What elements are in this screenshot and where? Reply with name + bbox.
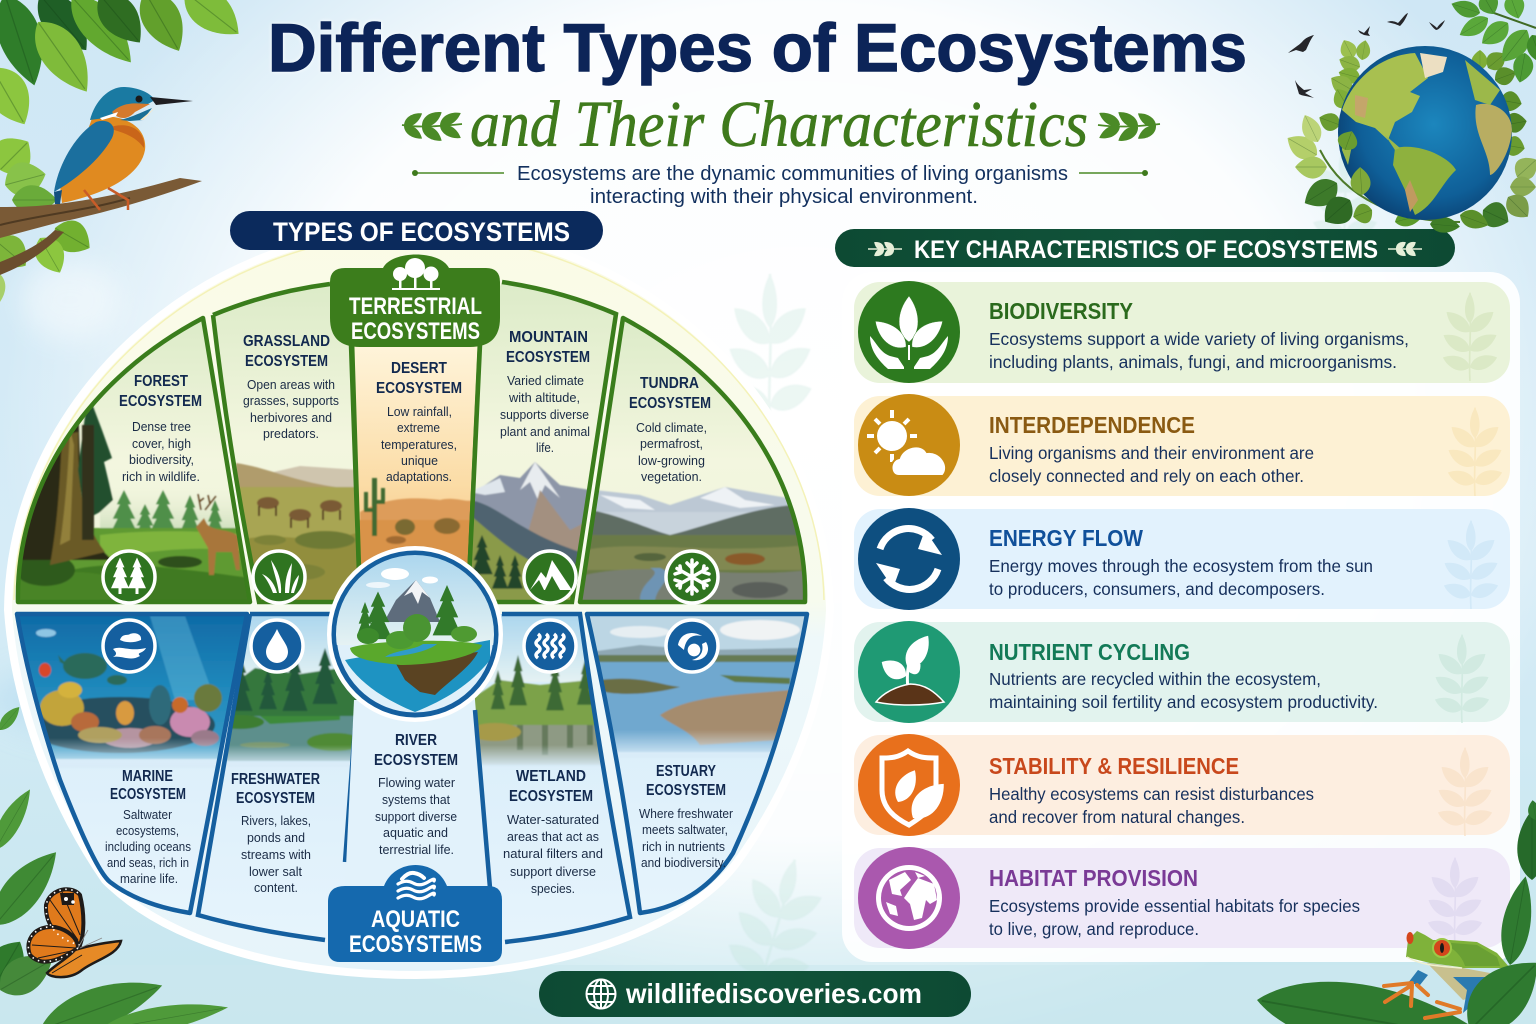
panel: marine ecosystem: MARINE xyxy=(122,768,173,785)
panel: wetland ecosystem: areas that act as xyxy=(507,829,599,844)
heading: key characteristics xyxy=(835,229,1455,267)
card: interdependence xyxy=(854,394,1510,496)
grassland scene xyxy=(236,462,356,600)
wetland scene xyxy=(474,614,600,765)
illustration: bottom-right leaves and frog xyxy=(1252,799,1536,1024)
panel: marine ecosystem: including oceans xyxy=(105,839,191,854)
estuary scene xyxy=(590,616,804,752)
badge: terrestrial ecosystems: ECOSYSTEMS xyxy=(351,318,480,345)
panel: mountain ecosystem: supports diverse xyxy=(500,407,589,422)
panel: forest ecosystem: rich in wildlife. xyxy=(122,469,200,484)
panel: forest ecosystem xyxy=(10,318,260,608)
panel: forest ecosystem: FOREST xyxy=(134,373,188,390)
panel: marine ecosystem xyxy=(10,614,250,913)
panel: wetland ecosystem: WETLAND xyxy=(516,768,586,785)
panel: tundra ecosystem: Cold climate, xyxy=(636,420,707,435)
card: nutrient cycling xyxy=(854,621,1510,723)
panel: grassland ecosystem: GRASSLAND xyxy=(243,333,330,350)
marine scene xyxy=(20,616,244,760)
panel: river ecosystem: systems that xyxy=(382,792,450,807)
badge: aquatic ecosystems: ECOSYSTEMS xyxy=(349,931,482,958)
panel: wetland ecosystem: ECOSYSTEM xyxy=(509,788,593,805)
illustration: top-right branch xyxy=(1449,0,1536,84)
panel: desert ecosystem xyxy=(353,346,478,565)
heading: types of ecosystems xyxy=(230,211,603,250)
panel: wetland ecosystem: natural filters and xyxy=(503,846,603,861)
panel: tundra ecosystem: TUNDRA xyxy=(640,375,699,392)
panel: marine ecosystem: and seas, rich in xyxy=(107,855,189,870)
panel: estuary ecosystem: rich in nutrients xyxy=(642,839,725,854)
panel: river ecosystem: aquatic and xyxy=(383,825,448,840)
panel: forest ecosystem: Dense tree xyxy=(132,419,191,434)
badge: terrestrial ecosystems xyxy=(330,254,500,347)
card: stability and resilience: and recover from natural changes. xyxy=(989,807,1245,827)
panel: desert ecosystem: DESERT xyxy=(391,360,447,377)
panel: key characteristics xyxy=(835,229,1520,962)
card: stability and resilience: STABILITY & RESILIENCE xyxy=(989,753,1239,779)
panel: freshwater ecosystem: FRESHWATER xyxy=(231,771,320,788)
panel: mountain ecosystem: with altitude, xyxy=(508,390,580,405)
intro text: interacting with their physical environment. xyxy=(590,186,978,208)
panel: tundra ecosystem: permafrost, xyxy=(640,436,703,451)
card: interdependence: INTERDEPENDENCE xyxy=(989,412,1195,438)
card: energy flow xyxy=(854,508,1510,610)
deer xyxy=(196,494,240,575)
icon: water drop xyxy=(251,620,303,672)
panel: estuary ecosystem: and biodiversity. xyxy=(641,855,726,870)
icon: shield with leaves xyxy=(858,734,960,836)
watermark leaves xyxy=(715,146,1380,1002)
panel: freshwater ecosystem: ponds and xyxy=(247,830,305,845)
panel: estuary ecosystem: ECOSYSTEM xyxy=(646,782,726,799)
panel: grassland ecosystem: grasses, supports xyxy=(243,393,339,408)
icon: trees xyxy=(392,258,440,290)
subtitle: and Their Characteristics xyxy=(470,88,1088,161)
panel: desert ecosystem: Low rainfall, xyxy=(387,404,452,419)
card: biodiversity xyxy=(854,281,1510,383)
panel: desert ecosystem: ECOSYSTEM xyxy=(376,380,462,397)
icon: waves xyxy=(103,620,155,672)
panel: wetland ecosystem: species. xyxy=(531,881,575,896)
illustration: kingfisher xyxy=(54,87,193,210)
panel: forest ecosystem: biodiversity, xyxy=(129,452,194,467)
card: biodiversity: including plants, animals, fungi, and microorganisms. xyxy=(989,352,1397,372)
icon: pine trees xyxy=(103,551,155,603)
panel: river ecosystem: ECOSYSTEM xyxy=(374,752,458,769)
panel: forest ecosystem: ECOSYSTEM xyxy=(119,393,202,410)
card: interdependence: closely connected and rely on each other. xyxy=(989,466,1304,486)
panel: river ecosystem: Flowing water xyxy=(378,775,456,790)
icon: wavy lines xyxy=(524,620,576,672)
panel: freshwater ecosystem: streams with xyxy=(241,847,311,862)
panel: marine ecosystem: ECOSYSTEM xyxy=(110,786,186,803)
panel: wetland ecosystem: support diverse xyxy=(510,864,596,879)
panel: wetland ecosystem xyxy=(465,612,630,942)
forest scene xyxy=(20,406,248,600)
icon: globe xyxy=(858,847,960,949)
panel: marine ecosystem: marine life. xyxy=(120,871,178,886)
panel: wetland ecosystem: Water-saturated xyxy=(507,812,599,827)
card: biodiversity: BIODIVERSITY xyxy=(989,298,1133,324)
panel: tundra ecosystem: low-growing xyxy=(638,453,705,468)
panel: mountain ecosystem: Varied climate xyxy=(507,373,584,388)
panel: grassland ecosystem: herbivores and xyxy=(250,410,332,425)
panel: grassland ecosystem: ECOSYSTEM xyxy=(245,353,328,370)
card: nutrient cycling: maintaining soil fertility and ecosystem productivity. xyxy=(989,692,1378,712)
panel: estuary ecosystem: Where freshwater xyxy=(639,806,734,821)
card: nutrient cycling: NUTRIENT CYCLING xyxy=(989,639,1190,665)
panel: mountain ecosystem: MOUNTAIN xyxy=(509,329,588,346)
heading: key characteristics: KEY CHARACTERISTICS OF ECOSYSTEMS xyxy=(914,236,1378,264)
card: habitat provision: HABITAT PROVISION xyxy=(989,865,1198,891)
icon: waves xyxy=(398,873,434,899)
illustration: birds xyxy=(1288,13,1445,98)
panel: mountain ecosystem xyxy=(468,282,616,603)
panel: tundra ecosystem: ECOSYSTEM xyxy=(629,395,711,412)
badge: terrestrial ecosystems: TERRESTRIAL xyxy=(349,293,482,320)
panel: desert ecosystem: temperatures, xyxy=(381,437,457,452)
panel: tundra ecosystem xyxy=(580,318,810,603)
panel: freshwater ecosystem: ECOSYSTEM xyxy=(236,790,315,807)
icon: swirl xyxy=(666,620,718,672)
freshwater scene xyxy=(227,616,357,762)
tundra scene xyxy=(580,487,810,603)
illustration: branch xyxy=(0,178,202,275)
panel: mountain ecosystem: life. xyxy=(536,440,554,455)
footer: website pill xyxy=(539,971,971,1017)
panel: marine ecosystem: Saltwater xyxy=(123,807,173,822)
icon: sun and cloud xyxy=(858,394,960,496)
icon: hands holding plant xyxy=(858,281,960,383)
card: habitat provision: to live, grow, and reproduce. xyxy=(989,919,1199,939)
panel: freshwater ecosystem xyxy=(198,612,365,940)
panel: desert ecosystem: adaptations. xyxy=(386,469,452,484)
card: habitat provision: Ecosystems provide essential habitats for species xyxy=(989,896,1360,916)
illustration: globe with leaves xyxy=(1282,37,1536,234)
panel: mountain ecosystem: plant and animal xyxy=(500,424,590,439)
panel: tundra ecosystem: vegetation. xyxy=(641,469,702,484)
mountain scene xyxy=(470,462,590,603)
card: nutrient cycling: Nutrients are recycled within the ecosystem, xyxy=(989,669,1321,689)
panel: marine ecosystem: ecosystems, xyxy=(116,823,179,838)
icon: sprout in soil xyxy=(858,621,960,723)
icon: grass xyxy=(253,551,305,603)
card: energy flow: ENERGY FLOW xyxy=(989,525,1143,551)
icon: cycle arrows xyxy=(858,508,960,610)
panel: grassland ecosystem: Open areas with xyxy=(247,377,335,392)
desert scene xyxy=(360,477,470,564)
badge: aquatic ecosystems xyxy=(328,865,502,962)
panel: desert ecosystem: extreme xyxy=(397,420,440,435)
card: energy flow: to producers, consumers, and decomposers. xyxy=(989,579,1325,599)
panel: grassland ecosystem: predators. xyxy=(263,426,319,441)
panel: freshwater ecosystem: Rivers, lakes, xyxy=(241,813,311,828)
illustration: top-left leaves xyxy=(0,0,251,306)
illustration: butterfly xyxy=(28,889,121,977)
panel: freshwater ecosystem: content. xyxy=(254,880,298,895)
card: habitat provision xyxy=(854,847,1510,949)
panel: river ecosystem: support diverse xyxy=(375,809,457,824)
card: stability and resilience: Healthy ecosystems can resist disturbances xyxy=(989,784,1314,804)
card: energy flow: Energy moves through the ecosystem from the sun xyxy=(989,556,1373,576)
panel: forest ecosystem: cover, high xyxy=(132,436,191,451)
intro text: Ecosystems are the dynamic communities of living organisms xyxy=(517,163,1068,185)
icon: left sprig xyxy=(401,108,463,145)
heading: types of ecosystems: TYPES OF ECOSYSTEMS xyxy=(273,217,570,247)
illustration: bottom-left leaves xyxy=(0,703,230,1024)
panel: river ecosystem: RIVER xyxy=(395,732,437,749)
badge: aquatic ecosystems: AQUATIC xyxy=(371,906,460,933)
panel: estuary ecosystem xyxy=(580,612,810,913)
panel: desert ecosystem: unique xyxy=(401,453,438,468)
card: stability and resilience xyxy=(854,734,1510,836)
footer: website pill: wildlifediscoveries.com xyxy=(625,978,922,1009)
panel: estuary ecosystem: meets saltwater, xyxy=(642,822,728,837)
card: interdependence: Living organisms and their environment are xyxy=(989,443,1314,463)
panel: mountain ecosystem: ECOSYSTEM xyxy=(506,349,590,366)
panel: types of ecosystems outer shape xyxy=(8,228,830,975)
icon: right sprig xyxy=(1097,108,1160,145)
intro text xyxy=(412,163,1148,208)
title: Different Types of Ecosystems xyxy=(268,10,1247,86)
card: biodiversity: Ecosystems support a wide variety of living organisms, xyxy=(989,329,1409,349)
panel: river ecosystem xyxy=(345,700,490,888)
icon: web globe xyxy=(586,980,616,1008)
panel: grassland ecosystem xyxy=(213,284,365,603)
panel: freshwater ecosystem: lower salt xyxy=(249,864,302,879)
icon: mountains xyxy=(524,551,576,603)
center river island medallion xyxy=(327,546,503,722)
icon: snowflake xyxy=(666,551,718,603)
panel: river ecosystem: terrestrial life. xyxy=(379,842,454,857)
frog xyxy=(1384,931,1510,1018)
panel: estuary ecosystem: ESTUARY xyxy=(656,763,716,780)
